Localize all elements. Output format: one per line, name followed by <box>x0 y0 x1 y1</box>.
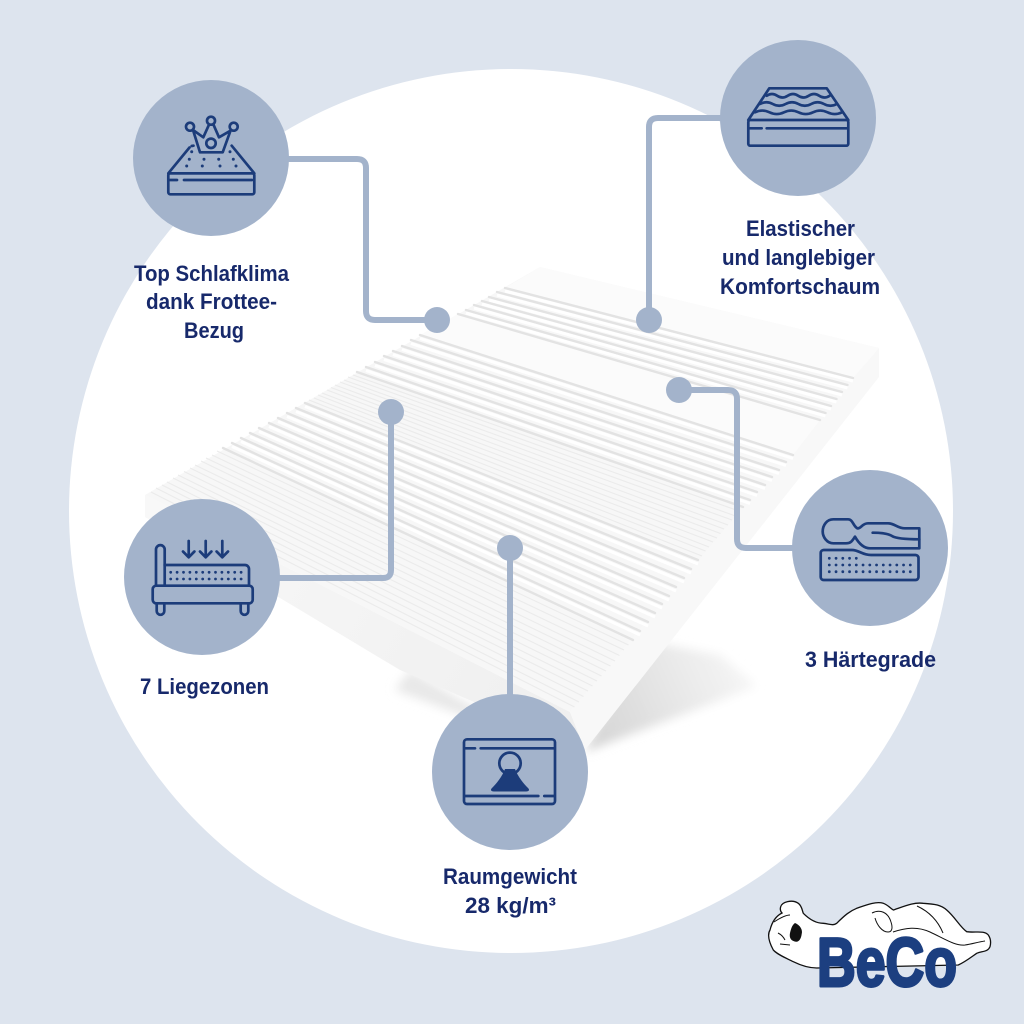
panel: Komfortschaum <box>720 40 880 299</box>
circle badge <box>124 499 280 655</box>
mattress right side face <box>570 348 879 750</box>
panel: Raumgewicht <box>432 694 588 918</box>
panel: Top Schlafklima <box>133 80 290 343</box>
white ridge crests <box>232 291 853 635</box>
label <box>134 261 290 343</box>
connector: Härtegrade <box>679 390 800 548</box>
circle badge <box>432 694 588 850</box>
panel: 3 Härtegrade <box>792 470 948 672</box>
bear illustration <box>769 901 991 968</box>
circle badge <box>133 80 289 236</box>
connector lines <box>275 118 800 700</box>
label: 28 kg/m³ <box>465 893 556 918</box>
connector: Raumgewicht <box>507 548 513 700</box>
circle badge <box>792 470 948 626</box>
connector: Komfortschaum <box>649 118 725 320</box>
icon: density weight <box>464 739 555 804</box>
connector: Liegezonen <box>275 412 391 578</box>
label: Komfortschaum <box>720 274 880 299</box>
label: Bezug <box>184 318 244 343</box>
panel: 7 Liegezonen <box>124 499 280 699</box>
mattress <box>145 267 879 752</box>
icon: body on mattress <box>821 519 919 580</box>
flat zones <box>420 267 879 455</box>
label: Raumgewicht <box>443 864 578 889</box>
wordmark: BeCo <box>817 924 957 1001</box>
label: und langlebiger <box>722 245 875 270</box>
label <box>443 864 578 918</box>
logo: BeCo bear <box>769 901 991 1001</box>
connector: Schlafklima <box>285 159 437 320</box>
fine ridge lines <box>151 375 739 707</box>
label <box>720 216 880 299</box>
mattress shadow <box>395 640 757 752</box>
label: 7 Liegezonen <box>140 674 269 699</box>
label: dank Frottee- <box>146 289 277 314</box>
connector dots <box>378 307 692 561</box>
label: Elastischer <box>746 216 855 241</box>
label: 3 Härtegrade <box>805 647 936 672</box>
icon: mattress with crown <box>168 117 254 194</box>
icon: foam mattress <box>748 88 848 146</box>
mattress front face <box>145 495 585 750</box>
circle badge <box>720 40 876 196</box>
white circle panel <box>69 69 953 953</box>
mattress top surface <box>145 267 879 712</box>
label: Top Schlafklima <box>134 261 290 286</box>
icon: bed with zones <box>153 541 253 615</box>
coarse ridge grooves <box>223 288 853 640</box>
